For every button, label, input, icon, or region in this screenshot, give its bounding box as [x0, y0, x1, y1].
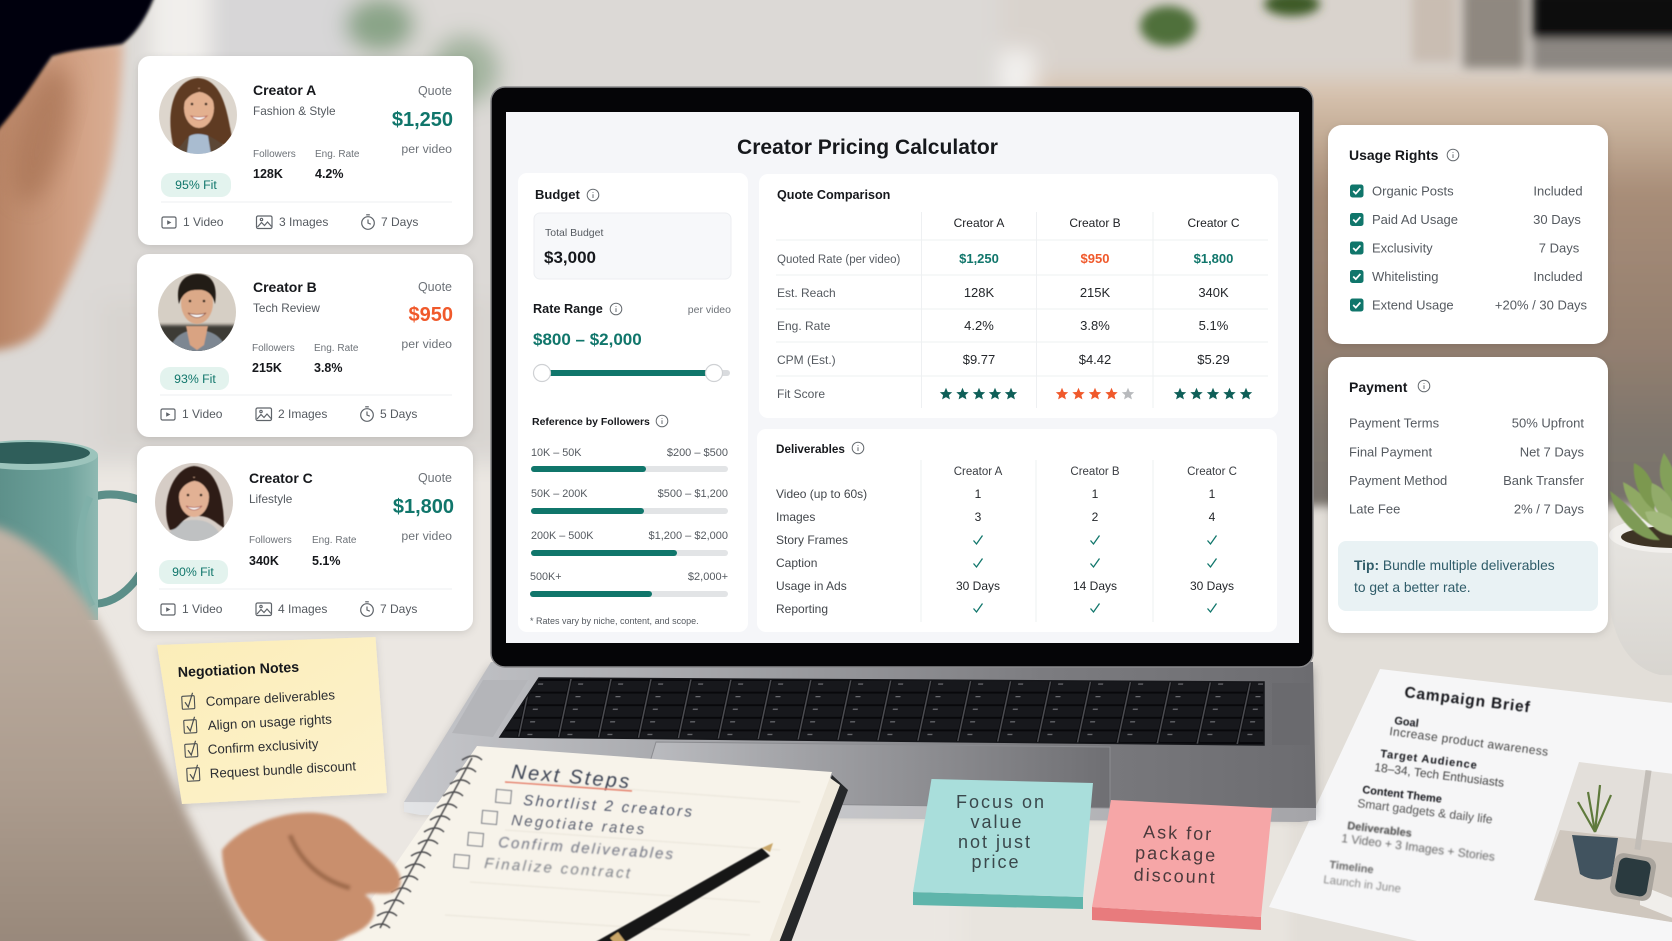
identity B — [253, 279, 320, 315]
stats B: 3.8% — [314, 361, 342, 375]
teal note handwriting — [956, 792, 1046, 872]
keyboard — [500, 678, 1264, 745]
quote B: per video — [401, 337, 452, 351]
usage row organic posts: Organic Posts — [1372, 184, 1454, 198]
quote A: Quote — [418, 84, 452, 98]
identity A: Creator A — [253, 82, 316, 98]
row: cpm: $4.42 — [1079, 352, 1111, 367]
reference row 50K-200K: 50K – 200K — [531, 488, 588, 500]
tip callout — [1338, 541, 1598, 611]
payment rows: Late Fee — [1349, 502, 1400, 516]
brief text: Goal — [1394, 715, 1419, 730]
footnote: * Rates vary by niche, content, and scope. — [530, 616, 699, 626]
negotiation checklist: Align on usage rights — [207, 711, 333, 733]
payment rows: Bank Transfer — [1503, 473, 1585, 488]
person's shoulder — [0, 522, 260, 941]
reference row 200K-500K — [531, 530, 728, 556]
row: est reach — [777, 285, 1229, 300]
usage row extend: Extend Usage — [1372, 298, 1454, 312]
teal note handwriting: Focus on — [956, 792, 1046, 812]
deliverables values: 30 Days — [956, 579, 1000, 593]
deliverables row labels: Reporting — [776, 602, 828, 616]
pink note handwriting: package — [1135, 843, 1218, 865]
total budget box: $3,000 — [544, 248, 596, 267]
fit badge B: 93% Fit — [174, 372, 216, 386]
payment rows: Net 7 Days — [1520, 444, 1584, 460]
stats A: 128K — [253, 167, 283, 181]
panel: deliverables — [757, 429, 1277, 632]
potted plant — [1609, 453, 1672, 676]
notebook: Confirm deliverables — [498, 834, 674, 863]
deliverables summary B: 1 Video — [182, 407, 223, 421]
usage row organic posts: Included — [1533, 184, 1583, 198]
row: quoted rate: $1,800 — [1194, 251, 1233, 266]
usage row exclusivity: 7 Days — [1539, 240, 1580, 256]
laptop screen — [506, 112, 1299, 643]
stats C: Eng. Rate — [312, 535, 357, 546]
deliverables values: 2 — [1092, 510, 1099, 524]
fit badge A — [161, 173, 231, 197]
row: eng rate: 3.8% — [1080, 318, 1110, 333]
deliverables row labels: Caption — [776, 556, 817, 570]
deliverables values: 30 Days — [1190, 579, 1234, 593]
brief photo — [1534, 762, 1672, 925]
deliverables header — [954, 466, 1237, 478]
identity B: Tech Review — [253, 301, 320, 315]
negotiation checklist: Request bundle discount — [209, 758, 357, 781]
card: creator B — [137, 254, 473, 437]
identity C: Lifestyle — [249, 492, 293, 506]
quote B — [401, 280, 453, 351]
fit badge A: 95% Fit — [175, 178, 217, 192]
fit badge C — [159, 560, 228, 584]
reference row 10K-50K: $200 – $500 — [667, 447, 728, 459]
notebook: Negotiate rates — [511, 812, 645, 838]
deliverables header: Creator C — [1187, 466, 1237, 478]
quote B: $950 — [408, 304, 453, 326]
brief text: Campaign Brief — [1404, 684, 1531, 716]
quote table header: Creator A — [954, 216, 1004, 230]
stats A — [253, 149, 360, 181]
negotiation checklist — [182, 687, 357, 781]
sticky note: focus on value — [913, 779, 1093, 909]
brief text: Content Theme — [1362, 784, 1443, 806]
quote A: per video — [401, 142, 452, 156]
quote C: Quote — [418, 471, 452, 485]
usage row paid ad: Paid Ad Usage — [1372, 212, 1458, 227]
quote C: $1,800 — [393, 496, 454, 518]
row: est reach: 215K — [1080, 285, 1111, 300]
deliverables values — [956, 487, 1234, 593]
deliverables summary C: 4 Images — [278, 602, 327, 616]
usage row extend — [1350, 298, 1588, 312]
row: quoted rate: $1,250 — [959, 251, 999, 266]
quote B: Quote — [418, 280, 452, 294]
total budget box — [534, 213, 731, 279]
payment rows: 50% Upfront — [1512, 416, 1584, 430]
reference row 200K-500K: $1,200 – $2,000 — [648, 530, 728, 542]
payment rows — [1349, 416, 1585, 516]
stats C: 340K — [249, 554, 279, 568]
row: cpm: CPM (Est.) — [777, 353, 836, 367]
row: quoted rate — [777, 251, 1233, 266]
laptop lid bezel — [491, 87, 1313, 667]
payment rows: Final Payment — [1349, 444, 1432, 460]
quote C: per video — [401, 529, 452, 543]
rate range value: $800 – $2,000 — [533, 330, 642, 349]
teal note handwriting: price — [971, 852, 1021, 872]
notebook — [340, 746, 848, 941]
hand — [222, 813, 401, 941]
deliverables summary C — [161, 602, 417, 616]
row: eng rate: Eng. Rate — [777, 319, 831, 333]
pink note handwriting: discount — [1133, 865, 1217, 887]
payment rows: 2% / 7 Days — [1514, 502, 1584, 516]
stats C: Followers — [249, 535, 292, 546]
negotiation heading: Negotiation Notes — [177, 660, 300, 681]
brief text: Smart gadgets & daily life — [1357, 796, 1494, 827]
coffee mug — [0, 440, 140, 620]
reference row 500K+ — [530, 571, 728, 597]
payment rows: Payment Method — [1349, 473, 1447, 488]
reference by followers heading: Reference by Followers — [532, 416, 650, 428]
negotiation checklist: Compare deliverables — [205, 687, 336, 709]
quote table header: Creator B — [1069, 216, 1121, 230]
identity A — [253, 82, 336, 118]
reference row 10K-50K — [531, 447, 728, 472]
usage rights heading: Usage Rights — [1349, 147, 1439, 163]
deliverables values: 4 — [1209, 510, 1216, 524]
rate range heading: per video — [688, 304, 731, 316]
notebook: Shortlist 2 creators — [523, 792, 693, 821]
usage row extend: +20% / 30 Days — [1495, 298, 1588, 312]
avatar A — [159, 76, 237, 154]
row: fit score: Fit Score — [777, 387, 825, 401]
stats A: 4.2% — [315, 167, 344, 181]
row: eng rate: 5.1% — [1199, 318, 1229, 333]
screen title: Creator Pricing Calculator — [737, 135, 999, 159]
row: fit score — [777, 387, 1252, 401]
tip callout: Tip: Bundle multiple deliverables — [1354, 558, 1555, 573]
rate range heading: Rate Range — [533, 302, 603, 316]
fit badge C: 90% Fit — [172, 565, 214, 579]
deliverables summary A: 3 Images — [279, 215, 328, 229]
stats C — [249, 535, 357, 568]
campaign brief document: Launch in June — [1323, 874, 1402, 895]
deliverables values: 3 — [975, 510, 982, 524]
reference row 200K-500K: 200K – 500K — [531, 530, 594, 542]
stats A: Eng. Rate — [315, 149, 360, 160]
usage row whitelisting: Included — [1533, 269, 1583, 284]
campaign brief document: Timeline — [1329, 859, 1374, 876]
row: quoted rate: Quoted Rate (per video) — [777, 254, 901, 266]
row: cpm — [777, 352, 1230, 367]
pen — [590, 843, 773, 941]
laptop — [404, 87, 1316, 822]
deliverables header: Creator B — [1070, 466, 1120, 478]
deliverables summary A — [162, 215, 418, 229]
stats B — [252, 343, 359, 375]
deliverables summary C: 1 Video — [182, 602, 223, 616]
payment rows: Payment Terms — [1349, 416, 1440, 430]
panel: usage rights — [1328, 125, 1608, 344]
total budget box: Total Budget — [545, 227, 603, 239]
stats B: Followers — [252, 343, 295, 354]
teal note handwriting: value — [970, 812, 1024, 832]
brief text: Target Audience — [1380, 748, 1477, 772]
panel: payment — [1328, 357, 1608, 633]
quote comparison heading: Quote Comparison — [777, 188, 890, 202]
deliverables row labels: Usage in Ads — [776, 579, 847, 593]
pink note handwriting — [1133, 822, 1218, 887]
stats C: 5.1% — [312, 554, 340, 568]
stats B: Eng. Rate — [314, 343, 359, 354]
deliverables row labels: Images — [776, 510, 815, 524]
campaign brief document: Deliverables — [1347, 820, 1412, 840]
avatar C — [155, 463, 233, 541]
fit badge B — [160, 367, 229, 390]
deliverables summary B — [161, 407, 417, 421]
deliverables values: 14 Days — [1073, 579, 1117, 593]
identity A: Fashion & Style — [253, 104, 336, 118]
reference row 500K+: $2,000+ — [688, 571, 728, 583]
reference row 10K-50K: 10K – 50K — [531, 447, 582, 459]
quote table header: Creator C — [1187, 216, 1240, 230]
sticky note: negotiation notes — [157, 637, 387, 804]
quote A: $1,250 — [392, 109, 453, 131]
deliverables row labels: Story Frames — [776, 533, 848, 547]
negotiation checklist: Confirm exclusivity — [207, 736, 319, 757]
row: cpm: $5.29 — [1197, 352, 1230, 367]
row: est reach: 128K — [964, 285, 995, 300]
budget heading: Budget — [535, 187, 580, 202]
campaign brief document: 1 Video + 3 Images + Stories — [1341, 831, 1496, 864]
row: est reach: Est. Reach — [777, 286, 836, 300]
row: cpm: $9.77 — [963, 352, 995, 367]
tip callout: to get a better rate. — [1354, 580, 1471, 595]
deliverables summary B: 2 Images — [278, 407, 327, 421]
usage row organic posts — [1350, 184, 1583, 198]
spiral binding — [370, 756, 482, 928]
brief text: 18–34, Tech Enthusiasts — [1374, 760, 1505, 790]
deliverables header: Creator A — [954, 466, 1003, 478]
usage row whitelisting: Whitelisting — [1372, 269, 1438, 284]
sticky note: package discount — [1092, 800, 1272, 930]
identity B: Creator B — [253, 279, 317, 295]
reference row 500K+: 500K+ — [530, 571, 562, 583]
quote C — [393, 471, 454, 543]
card: creator A — [138, 56, 473, 245]
avatar B — [158, 273, 236, 351]
deliverables row labels — [776, 487, 867, 616]
usage row exclusivity — [1350, 240, 1580, 256]
laptop base — [404, 662, 1316, 822]
row: quoted rate: $950 — [1081, 251, 1109, 266]
brief text: Increase product awareness — [1389, 724, 1549, 759]
stats B: 215K — [252, 361, 282, 375]
deliverables summary B: 5 Days — [380, 407, 417, 421]
identity C: Creator C — [249, 470, 313, 486]
identity C — [249, 470, 313, 506]
reference row 50K-200K: $500 – $1,200 — [658, 488, 728, 500]
pink note handwriting: Ask for — [1143, 822, 1214, 844]
brief text — [1357, 684, 1549, 827]
rate range slider — [533, 364, 730, 382]
usage row paid ad: 30 Days — [1533, 212, 1581, 227]
row: eng rate: 4.2% — [964, 318, 994, 333]
usage row whitelisting — [1350, 269, 1583, 284]
deliverables row labels: Video (up to 60s) — [776, 487, 867, 501]
row: est reach: 340K — [1198, 285, 1229, 300]
deliverables summary A: 7 Days — [381, 215, 418, 229]
next steps handwritten list: Next Steps — [511, 761, 630, 793]
card: creator C — [137, 446, 473, 631]
row: eng rate — [777, 318, 1229, 333]
panel: quote comparison — [759, 174, 1278, 418]
notebook: Finalize contract — [484, 855, 631, 882]
quote A — [392, 84, 453, 156]
rate range heading — [533, 302, 731, 316]
deliverables heading: Deliverables — [776, 443, 845, 456]
panel: budget — [518, 173, 748, 632]
quote table header — [954, 216, 1240, 230]
deliverables values: 1 — [1092, 487, 1099, 501]
stats A: Followers — [253, 149, 296, 160]
trackpad — [638, 742, 1110, 808]
reference row 50K-200K — [531, 488, 728, 514]
deliverables values: 1 — [1209, 487, 1216, 501]
campaign brief document — [1269, 669, 1672, 941]
deliverables values: 1 — [975, 487, 982, 501]
deliverables summary C: 7 Days — [380, 602, 417, 616]
usage row exclusivity: Exclusivity — [1372, 240, 1433, 256]
payment heading: Payment — [1349, 379, 1408, 395]
usage row paid ad — [1350, 212, 1581, 227]
person's head from behind — [0, 0, 160, 352]
teal note handwriting: not just — [958, 832, 1032, 852]
deliverables check marks — [974, 536, 1216, 612]
next steps handwritten list — [454, 761, 632, 869]
deliverables summary A: 1 Video — [183, 215, 224, 229]
